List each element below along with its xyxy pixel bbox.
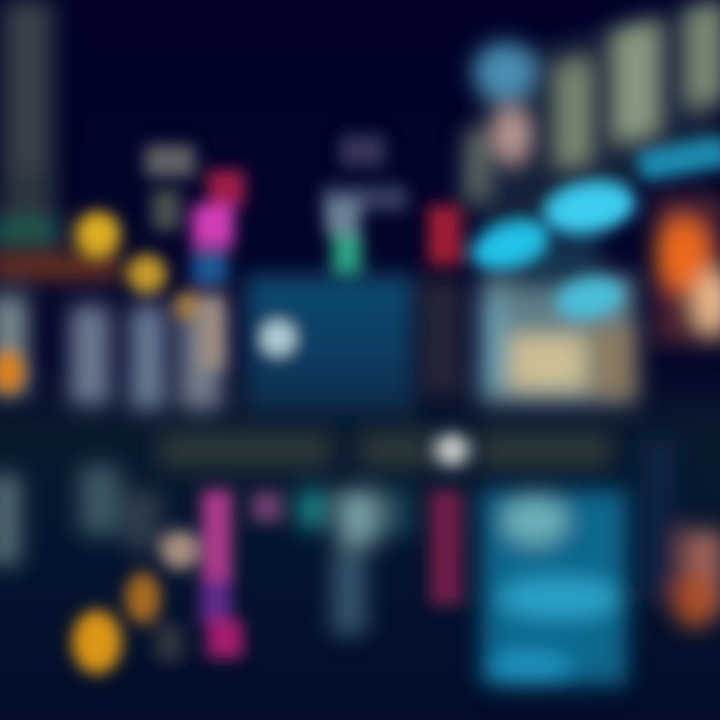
right building diagonal facade [460,0,720,240]
right building upper facade [465,0,720,200]
central distant tower [322,135,407,273]
cyan neon signs [465,137,720,325]
reflection: red sign [430,490,462,605]
right building lower facade [480,240,638,405]
left tower [0,0,60,248]
central blue billboard [245,275,415,415]
red sign [428,205,462,265]
sign: pale tower and pink blue sign [145,145,245,370]
reflection: orange and yellow lights [72,530,200,674]
right orange neon sign [655,195,720,345]
reflection: right orange glow [640,440,720,628]
sign: orange glow at left edge [0,350,25,394]
sign: yellow lights [75,211,203,321]
reflection: cyan building [482,490,627,685]
white street light [435,433,469,467]
reflection: pink sign [200,490,282,658]
left water reflections [0,465,160,565]
left street buildings [0,252,222,410]
reflection: central tower [298,490,408,635]
street band [160,432,610,468]
dark grey building [420,280,462,395]
